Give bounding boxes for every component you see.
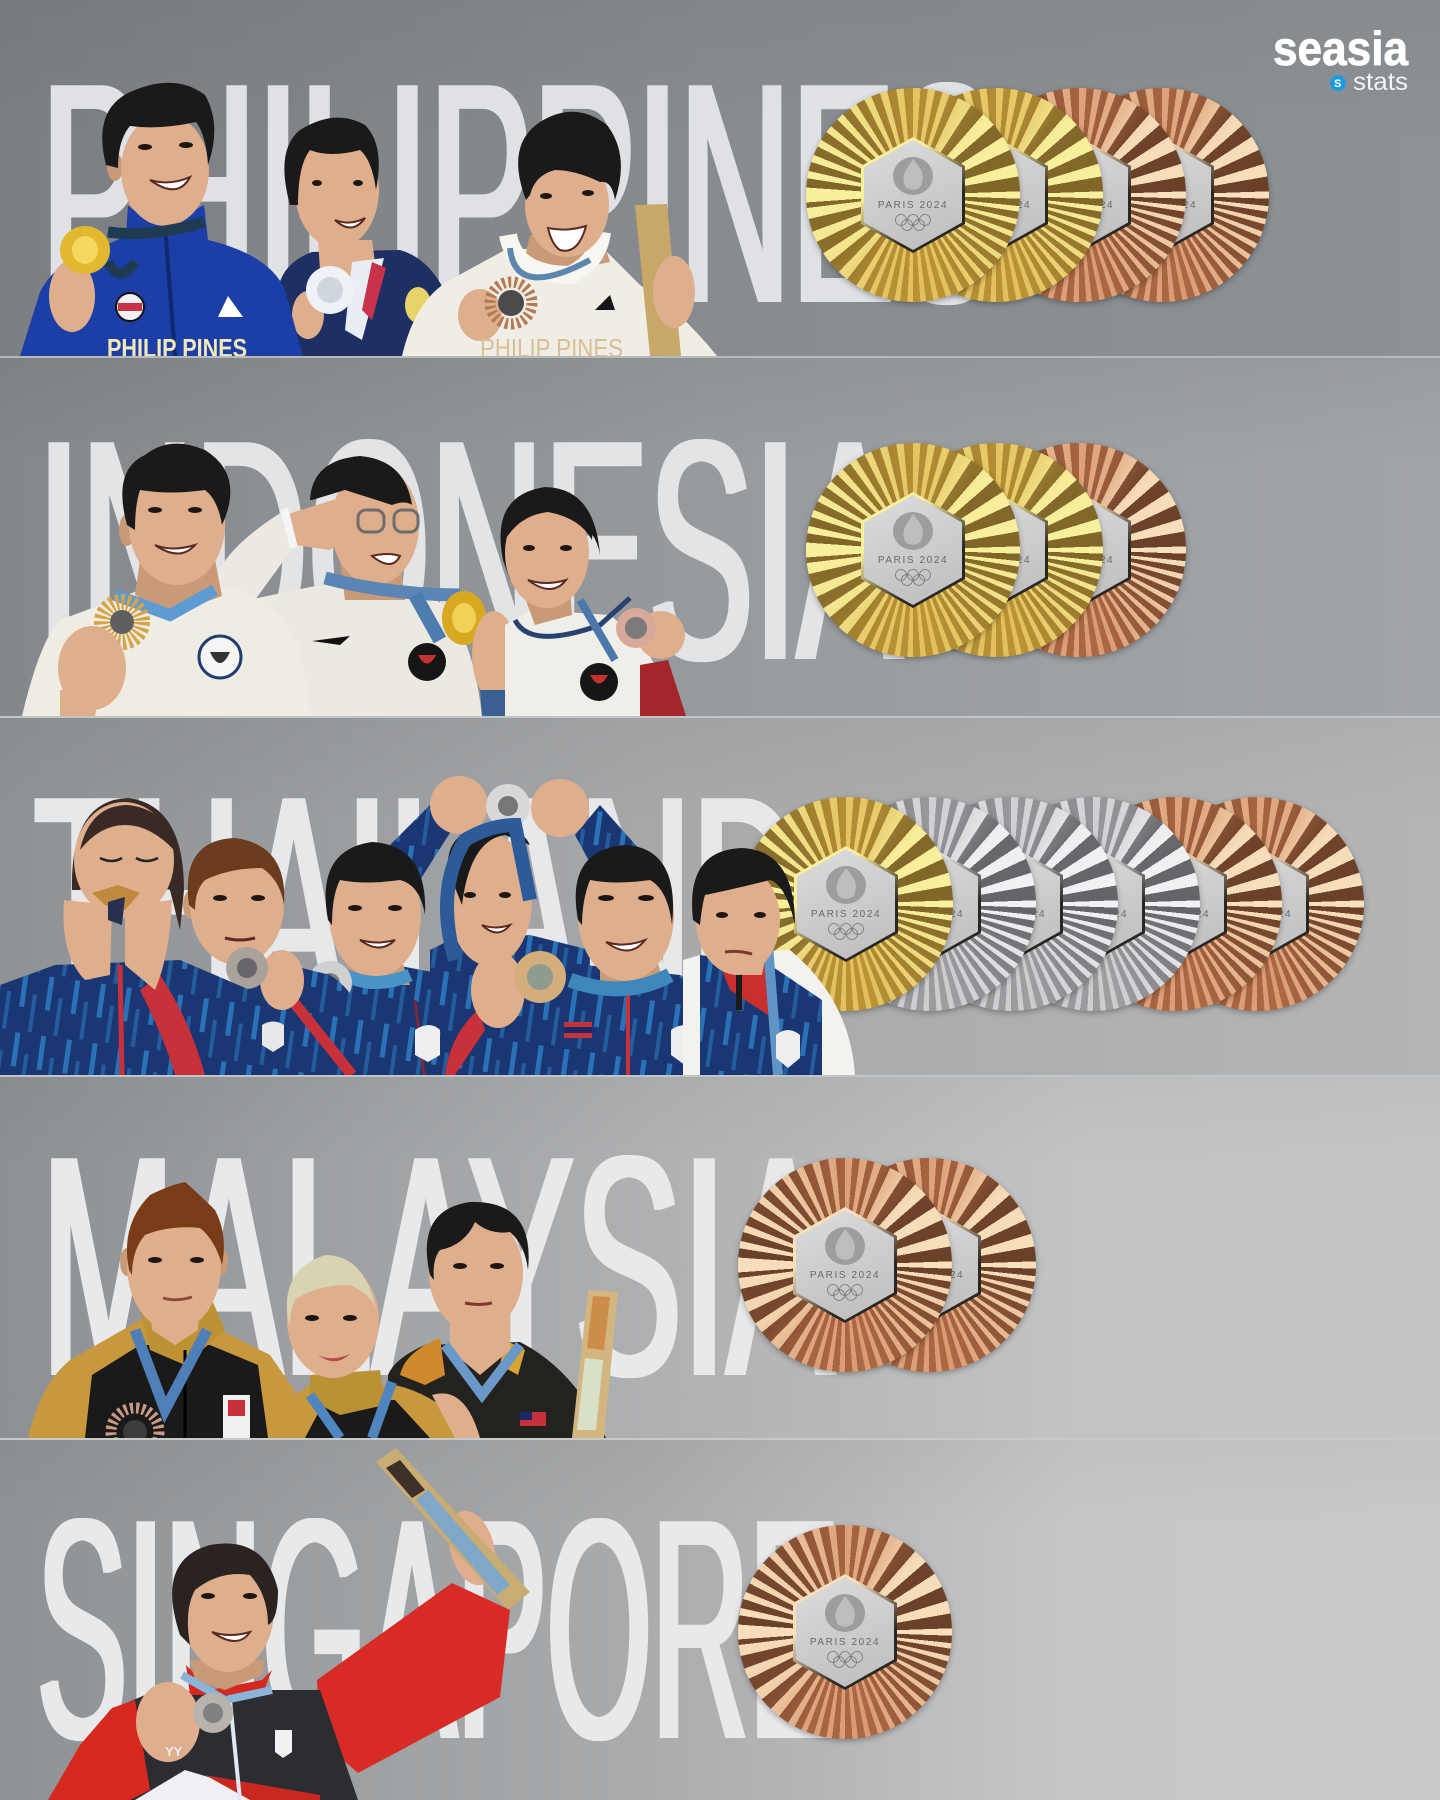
raised hand and trophy box [376, 1448, 530, 1610]
medals: 1 gold, 3 silver, 2 bronze: PARIS 2024 [976, 909, 1046, 920]
athletes: Singapore [48, 1448, 530, 1800]
medals: 2 bronze [735, 1157, 1039, 1377]
athlete: gymnast in blue [20, 83, 303, 363]
athletes: Indonesia [22, 444, 686, 716]
medals: 1 gold, 3 silver, 2 bronze: PARIS 2024 [1222, 909, 1292, 920]
athlete: man with silver medal [183, 838, 375, 1075]
athlete: saluting weightlifter [214, 456, 516, 716]
medals: 1 gold, 3 silver, 2 bronze [752, 796, 1367, 1016]
athlete: man in black and gold [28, 1182, 308, 1456]
medals: 2 gold, 1 bronze: PARIS 2024 [961, 555, 1031, 566]
athletes: Thailand [0, 776, 855, 1075]
athlete: man with bronze medal [445, 845, 769, 1075]
logo: seasia stats: S [1334, 78, 1341, 90]
athlete: man with blond hair [269, 1255, 480, 1438]
medals: 1 gold, 3 silver, 2 bronze: PARIS 2024 [811, 909, 881, 920]
athlete: shooter with raised arm [48, 1543, 510, 1800]
medals: 2 gold, 2 bronze [802, 88, 1272, 306]
medals: 1 gold, 3 silver, 2 bronze: PARIS 2024 [894, 909, 964, 920]
panel: Malaysia [0, 1077, 1440, 1438]
medals: 2 gold, 2 bronze: PARIS 2024 [878, 200, 948, 211]
athlete: weightlifter in white [402, 112, 717, 363]
logo: seasia stats [1273, 30, 1409, 96]
athlete: smiling man with ribbon [308, 842, 448, 1075]
athlete: woman kissing medal [0, 798, 255, 1075]
medals: 2 gold, 2 bronze: PARIS 2024 [961, 200, 1031, 211]
medals: 1 bronze: PARIS 2024 [810, 1637, 880, 1648]
panel: Philippines [0, 0, 1440, 356]
medals: 2 gold, 1 bronze: PARIS 2024 [878, 555, 948, 566]
athlete: boxer in navy [279, 118, 444, 356]
medals: 2 gold, 1 bronze [804, 442, 1188, 662]
athletes: Philippines [20, 82, 717, 356]
medals: 2 gold, 2 bronze: PARIS 2024 [1044, 200, 1114, 211]
medals: 1 gold, 3 silver, 2 bronze: PARIS 2024 [1058, 909, 1128, 920]
athletes: Malaysia [28, 1182, 618, 1438]
panel: Singapore [0, 1440, 1440, 1800]
medals: 2 bronze: PARIS 2024 [894, 1270, 964, 1281]
medals: 1 bronze [735, 1524, 955, 1744]
panel: Indonesia [0, 358, 1440, 716]
medals: 2 gold, 2 bronze: PARIS 2024 [1127, 200, 1197, 211]
athlete: man with black polo [388, 1202, 606, 1438]
athlete: girl with red collar [683, 848, 855, 1075]
athlete: shooter with raised arm: YY [165, 1744, 183, 1759]
medals: 1 gold, 3 silver, 2 bronze: PARIS 2024 [1140, 909, 1210, 920]
panel: Thailand [0, 718, 1440, 1075]
athlete: woman weightlifter [501, 487, 686, 716]
logo: seasia stats: stats [1353, 68, 1408, 96]
medals: 2 bronze: PARIS 2024 [810, 1270, 880, 1281]
athlete: gymnast with gold medal [22, 444, 312, 716]
trophy box: Malaysia [572, 1290, 618, 1438]
athlete: raised medal [385, 776, 640, 1075]
medals: 2 gold, 1 bronze: PARIS 2024 [1044, 555, 1114, 566]
